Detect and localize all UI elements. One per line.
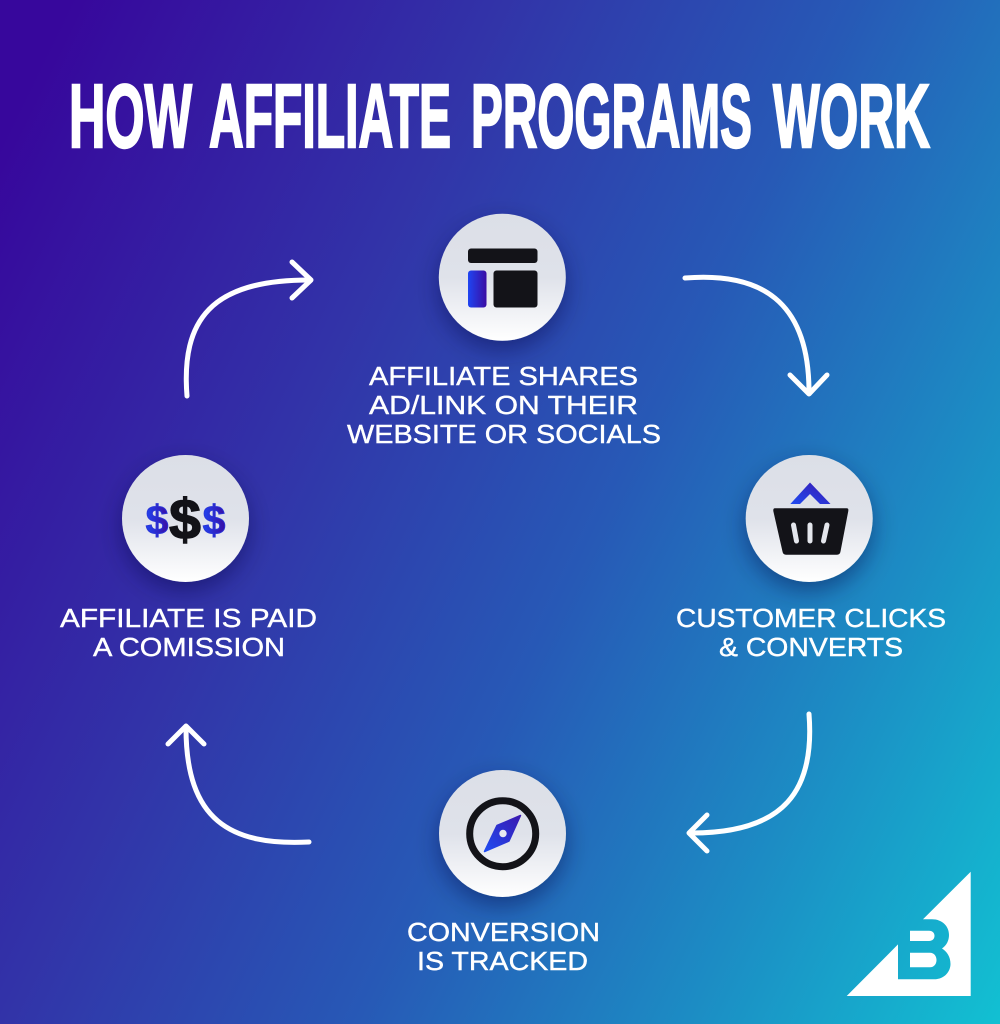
arrow: share to customer (685, 277, 827, 394)
arrow: customer to tracked (689, 714, 810, 851)
step 2 label: CUSTOMER CLICKS (676, 603, 946, 633)
step 2 icon: basket (746, 455, 873, 582)
step 3 label: IS TRACKED (417, 946, 588, 976)
step 3 label (407, 917, 600, 976)
step 2 label: & CONVERTS (719, 632, 903, 662)
step 4 label (60, 603, 317, 662)
step 1 icon: web layout (439, 214, 566, 341)
logo (847, 872, 971, 996)
arrow: paid to share (186, 262, 311, 396)
step 4 label: AFFILIATE IS PAID (60, 603, 317, 633)
step 1 label: AD/LINK ON THEIR (369, 390, 638, 420)
title: PROGRAMS (471, 67, 752, 167)
step 4 label: A COMISSION (93, 632, 285, 662)
arrow: tracked to paid (168, 726, 309, 842)
step 1 label: WEBSITE OR SOCIALS (347, 419, 661, 449)
title: AFFILIATE (209, 67, 451, 167)
step 4 icon: dollars (122, 455, 249, 582)
step 3 icon: compass (439, 770, 566, 897)
step 1 label: AFFILIATE SHARES (369, 361, 638, 391)
step 2 label (676, 603, 946, 662)
step 4 icon: dollars: $ (169, 488, 201, 552)
title: HOW (69, 67, 192, 167)
title (69, 67, 930, 167)
step 4 icon: dollars: $ (203, 497, 226, 543)
step 4 icon: dollars: $ (146, 497, 169, 543)
step 3 label: CONVERSION (407, 917, 600, 947)
step 1 label (347, 361, 661, 449)
